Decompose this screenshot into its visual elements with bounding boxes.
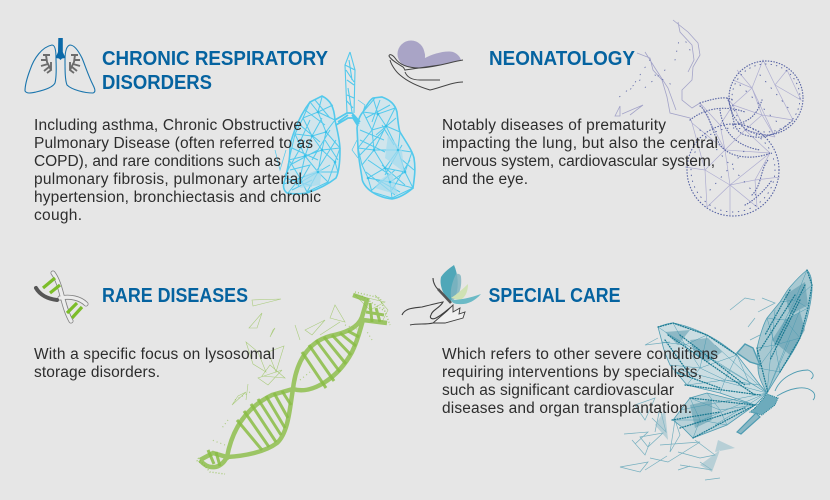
- text: neonatology description: nervous system, cardiovascular system,: [442, 153, 715, 170]
- text: chronic respiratory description: Including asthma, Chronic Obstructive: [34, 117, 302, 134]
- text: rare diseases description: storage disorders.: [34, 364, 160, 381]
- text: rare diseases description: With a specific focus on lysosomal: [34, 346, 275, 363]
- icon: baby in hand: [389, 40, 463, 90]
- text: chronic respiratory description: COPD), and rare conditions such as: [34, 153, 281, 170]
- text: rare diseases description: [34, 346, 275, 381]
- text: neonatology description: Notably diseases of prematurity: [442, 117, 666, 134]
- heading: chronic respiratory disorders: DISORDERS: [102, 72, 212, 94]
- text: neonatology description: and the eye.: [442, 171, 528, 188]
- text: special care description: such as significant cardiovascular: [442, 382, 674, 399]
- icon: DNA strand: [36, 273, 86, 321]
- panel: neonatology: [389, 20, 803, 216]
- heading: chronic respiratory disorders: CHRONIC RESPIRATORY: [102, 48, 329, 70]
- text: neonatology description: impacting the lung, but also the central: [442, 135, 718, 152]
- text: chronic respiratory description: Pulmonary Disease (often referred to as: [34, 135, 313, 152]
- panel: rare diseases: [34, 273, 390, 474]
- panel: chronic respiratory disorders: [25, 38, 415, 224]
- icon: butterfly on hand: [402, 265, 481, 325]
- heading: chronic respiratory disorders: [102, 48, 329, 94]
- text: neonatology description: [442, 117, 718, 188]
- text: chronic respiratory description: pulmonary fibrosis, pulmonary arterial: [34, 171, 302, 188]
- illustration: green DNA helix: [196, 292, 390, 474]
- illustration: mesh lungs: [275, 52, 415, 199]
- text: special care description: requiring interventions by specialists,: [442, 364, 702, 381]
- panel: special care: [402, 265, 815, 480]
- heading: rare diseases: RARE DISEASES: [102, 285, 248, 307]
- text: chronic respiratory description: cough.: [34, 207, 82, 224]
- illustration: mesh butterfly: [620, 270, 815, 480]
- text: special care description: [442, 346, 718, 417]
- heading: neonatology: NEONATOLOGY: [489, 48, 636, 70]
- text: chronic respiratory description: [34, 117, 321, 224]
- icon: lungs outline: [25, 38, 95, 93]
- text: chronic respiratory description: hypertension, bronchiectasis and chronic: [34, 189, 321, 206]
- text: special care description: diseases and organ transplantation.: [442, 400, 692, 417]
- heading: special care: SPECIAL CARE: [488, 285, 620, 307]
- text: special care description: Which refers to other severe conditions: [442, 346, 718, 363]
- illustration: dotted mesh infant: [615, 20, 803, 216]
